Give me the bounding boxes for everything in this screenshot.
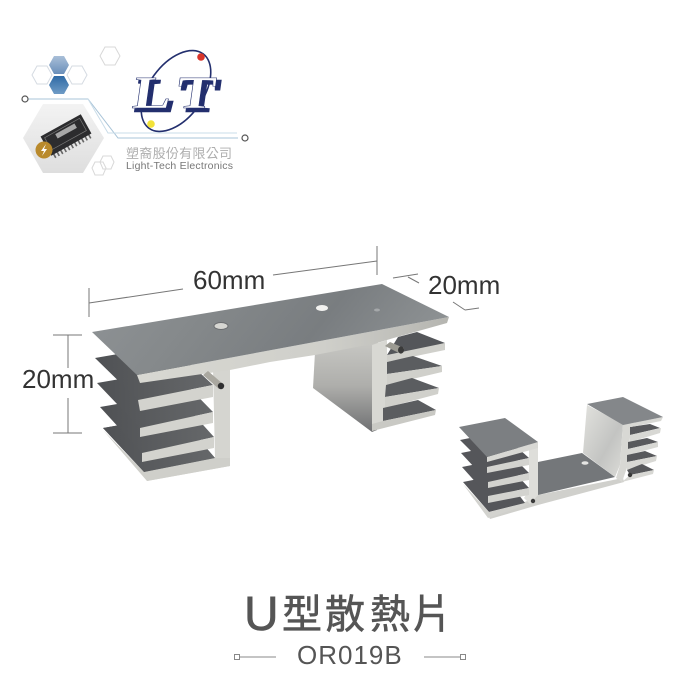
mounting hole left	[214, 322, 228, 330]
top plate front edge	[137, 317, 449, 383]
company name Chinese: 塑裔股份有限公司	[126, 146, 232, 161]
icon: LT logo mark	[127, 38, 225, 144]
icon: decorative hexagon cluster	[32, 47, 120, 175]
title: 散	[325, 593, 365, 637]
icon: gold lightning badge	[36, 142, 52, 158]
icon: LT logo mark: T	[177, 71, 223, 122]
product code with side markers	[234, 640, 466, 670]
icon: LT logo mark: L	[130, 68, 175, 119]
mounting hole right	[374, 308, 380, 312]
title: 熱	[370, 593, 410, 637]
icon: microchip	[41, 114, 93, 159]
product code with side markers: OR019B	[297, 640, 403, 670]
title: 片	[412, 593, 452, 637]
small heat sink photo illustration	[459, 397, 663, 519]
icon: LT logo mark: T	[174, 68, 219, 119]
screw right	[385, 342, 404, 354]
right support block	[313, 332, 445, 432]
left fin stack	[95, 345, 230, 481]
mounting hole centre	[316, 305, 328, 311]
circuit lines	[22, 96, 248, 141]
dimension: 60mm width: 60mm	[193, 265, 265, 295]
company logo block	[22, 38, 248, 175]
title: U	[244, 588, 279, 641]
company name English: Light-Tech Electronics	[126, 160, 233, 172]
left tower	[459, 418, 538, 518]
dimension: 20mm depth	[393, 270, 500, 310]
dimension: 60mm width	[89, 246, 377, 317]
hole	[582, 461, 588, 465]
screw left	[203, 371, 224, 389]
dimension: 20mm depth: 20mm	[428, 270, 500, 300]
icon: LT logo mark: L	[133, 71, 179, 122]
dimension: 20mm height: 20mm	[22, 364, 94, 394]
right tower	[583, 397, 663, 482]
large heat sink photo illustration	[92, 284, 449, 481]
icon: large hexagon behind chip	[23, 104, 104, 173]
dimension: 20mm height	[22, 335, 94, 433]
small screws	[531, 473, 632, 503]
base channel	[488, 453, 624, 519]
title: 型	[282, 593, 322, 637]
top plate surface	[92, 284, 449, 375]
